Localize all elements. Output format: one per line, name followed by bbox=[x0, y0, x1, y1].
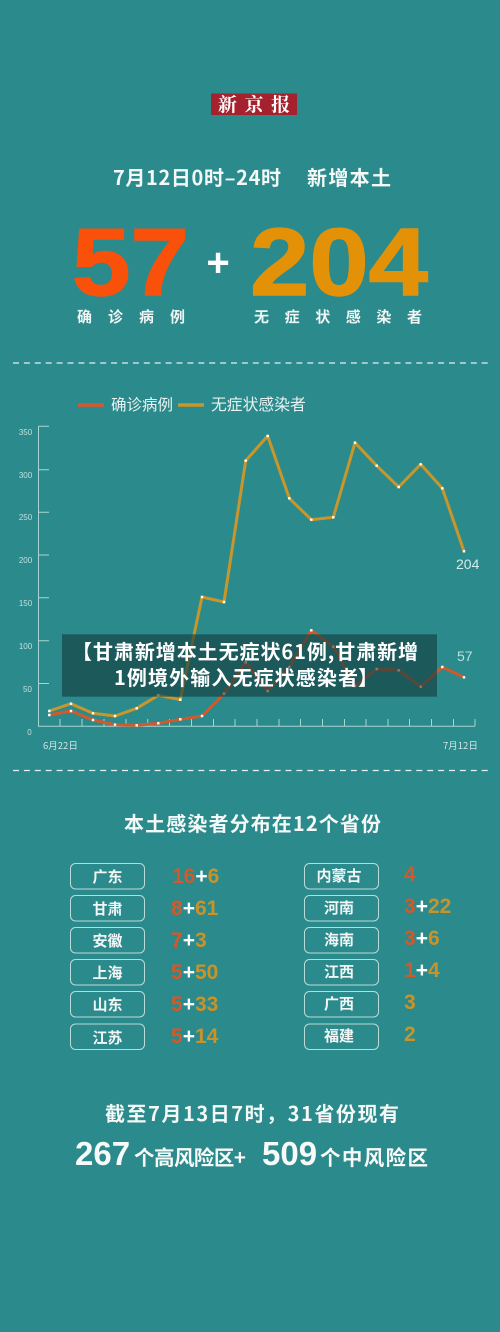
province: 甘肃: 8+61 bbox=[171, 897, 219, 920]
province: 山东: 山东 bbox=[92, 994, 123, 1015]
line chart: 204 bbox=[456, 556, 480, 572]
province: 内蒙古 bbox=[304, 863, 416, 889]
footer line 2: 267 bbox=[75, 1135, 130, 1172]
province: 山东 bbox=[70, 992, 218, 1017]
title: 7月12日0时–24时 bbox=[113, 162, 281, 191]
masthead logo: 新京报 bbox=[218, 90, 290, 117]
line chart: 100 bbox=[19, 642, 33, 651]
province: 海南 bbox=[304, 927, 440, 953]
headline banner: 甘肃新增本土无症状61例,甘肃新增 bbox=[93, 636, 418, 665]
province: 海南: 海南 bbox=[324, 929, 354, 950]
line chart: 150 bbox=[19, 599, 33, 608]
headline banner bbox=[62, 634, 437, 697]
label: asymptomatic: 无症状感染者 bbox=[254, 306, 422, 327]
province: 江西 bbox=[304, 959, 440, 985]
legend: 无症状感染者 bbox=[211, 392, 306, 415]
line chart: 57 bbox=[457, 648, 473, 664]
line chart: 50 bbox=[23, 685, 32, 694]
province: 广西: 广西 bbox=[324, 993, 354, 1014]
province: 河南: 河南 bbox=[324, 897, 354, 918]
footer line 2: 个高风险区+ bbox=[134, 1141, 246, 1171]
big number: confirmed: 57 bbox=[72, 209, 189, 316]
province: 安徽: 安徽 bbox=[92, 930, 123, 951]
label: confirmed: 确诊病例 bbox=[77, 306, 185, 327]
province: 安徽: 7+3 bbox=[171, 929, 207, 952]
province: 内蒙古: 4 bbox=[404, 863, 416, 886]
province: 山东: 5+33 bbox=[171, 993, 218, 1016]
line chart: 300 bbox=[19, 471, 33, 480]
province: 内蒙古: 内蒙古 bbox=[316, 865, 362, 886]
province: 广西: 3 bbox=[404, 991, 416, 1014]
plus sign: + bbox=[206, 241, 230, 285]
province: 安徽 bbox=[70, 928, 207, 953]
province: 海南: 3+6 bbox=[404, 927, 440, 950]
province: 福建: 2 bbox=[404, 1023, 416, 1046]
legend: 确诊病例 bbox=[111, 393, 173, 415]
line chart: 6月22日 bbox=[43, 738, 78, 752]
province: 江西: 江西 bbox=[324, 961, 354, 982]
province: 广东: 广东 bbox=[92, 866, 123, 887]
legend bbox=[78, 392, 306, 415]
line chart: 7月12日 bbox=[443, 738, 478, 752]
line chart: 0 bbox=[27, 728, 32, 737]
province: 甘肃 bbox=[70, 896, 219, 921]
province: 江苏: 江苏 bbox=[92, 1027, 123, 1048]
province: 上海: 上海 bbox=[92, 962, 123, 983]
section heading: 本土感染者分布在12个省份 bbox=[124, 808, 381, 837]
line chart: 350 bbox=[19, 428, 33, 437]
province: 福建: 福建 bbox=[324, 1025, 354, 1046]
province: 甘肃: 甘肃 bbox=[92, 898, 123, 919]
province: 河南 bbox=[304, 895, 451, 921]
line chart bbox=[19, 426, 480, 752]
province list: right column bbox=[304, 863, 451, 1050]
line chart: 250 bbox=[19, 513, 33, 522]
province: 江苏 bbox=[70, 1024, 219, 1050]
big number: asymptomatic: 204 bbox=[250, 209, 428, 316]
title right: 新增本土 bbox=[307, 162, 391, 191]
footer line 1: 截至7月13日7时，31省份现有 bbox=[105, 1098, 399, 1127]
headline banner: 】 bbox=[358, 662, 378, 691]
footer line 2: 个中风险区 bbox=[320, 1141, 428, 1171]
province: 广东: 16+6 bbox=[172, 865, 219, 888]
footer line 2: 509 bbox=[262, 1135, 317, 1172]
province: 江西: 1+4 bbox=[404, 959, 440, 982]
province list: left column bbox=[70, 864, 219, 1050]
province: 广西 bbox=[304, 991, 416, 1017]
province: 上海: 5+50 bbox=[171, 961, 218, 984]
line chart: 200 bbox=[19, 556, 33, 565]
headline banner: 1例境外输入无症状感染者 bbox=[114, 662, 358, 691]
province: 福建 bbox=[304, 1023, 416, 1050]
headline banner: 【 bbox=[72, 636, 92, 665]
province: 广东 bbox=[70, 864, 219, 889]
province: 河南: 3+22 bbox=[404, 895, 451, 918]
province: 江苏: 5+14 bbox=[171, 1025, 219, 1048]
province: 上海 bbox=[70, 960, 218, 985]
footer line 2 bbox=[75, 1135, 428, 1172]
